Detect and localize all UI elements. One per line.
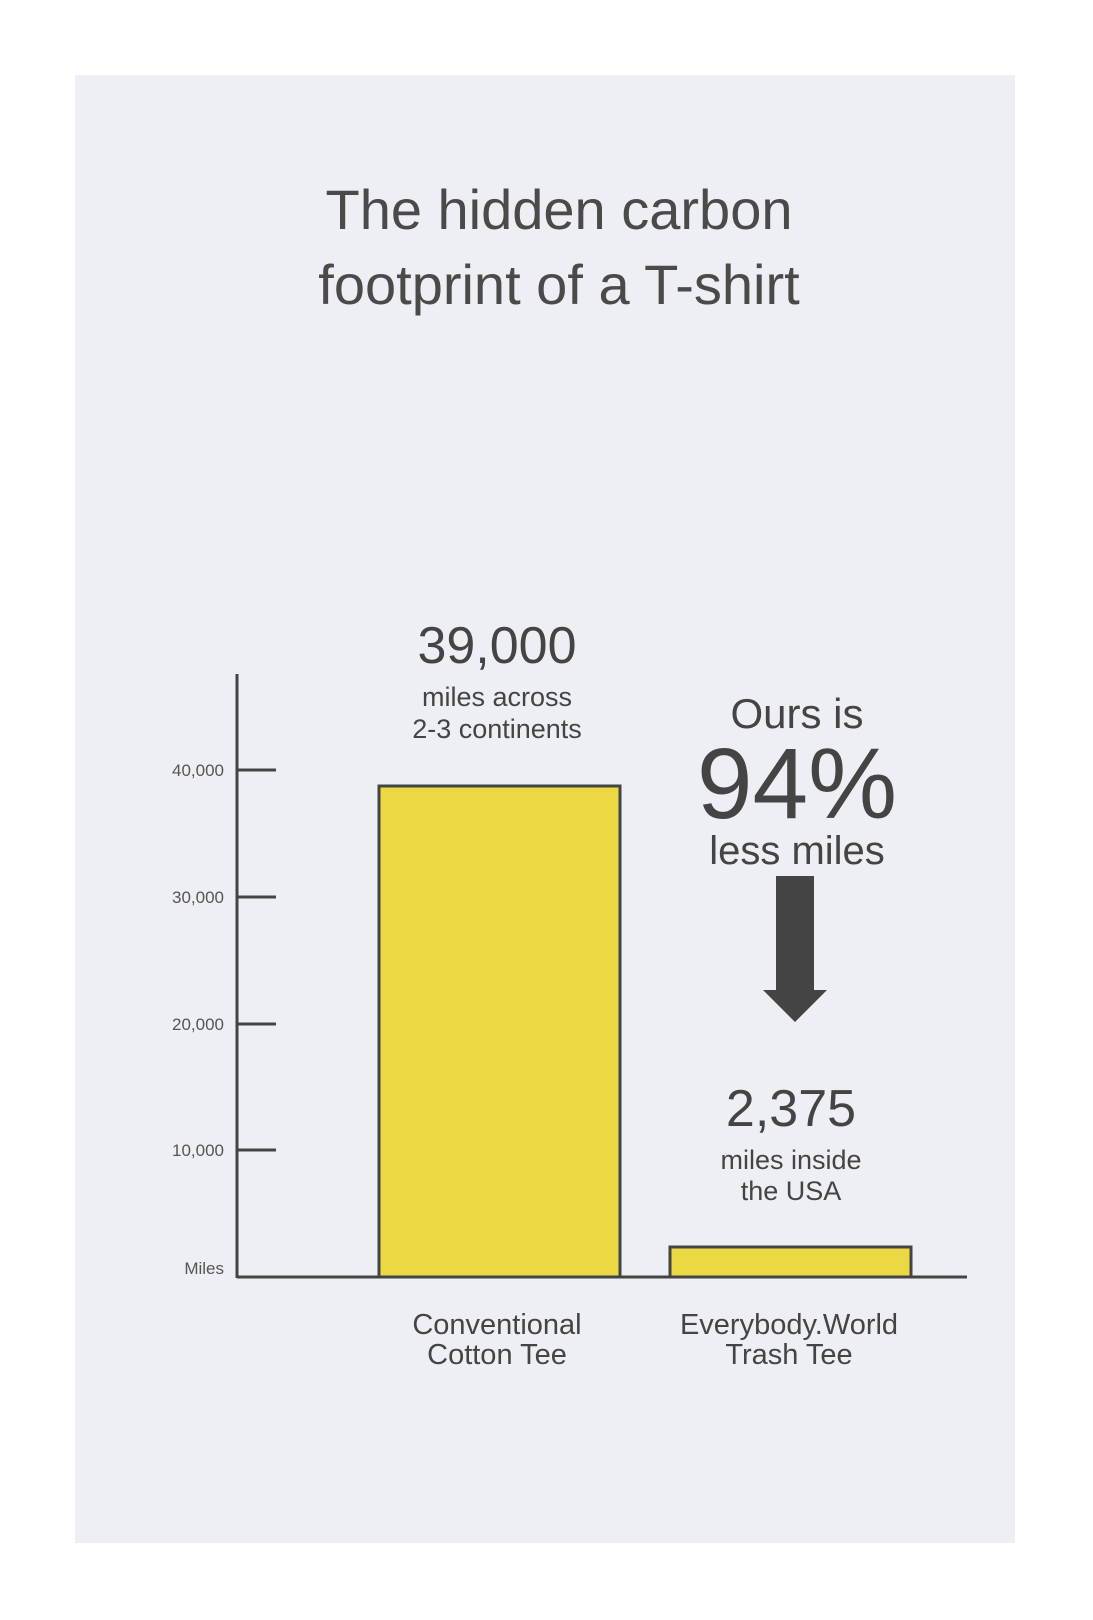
callout: 94% less miles: less miles: [709, 829, 885, 873]
callout: 94% less miles: Ours is: [730, 690, 864, 737]
title: The hidden carbon: [325, 178, 793, 241]
axis labels: 40,000: [172, 761, 224, 780]
axis labels: [172, 761, 224, 1278]
category labels: [412, 1309, 898, 1371]
bar: conventional cotton tee: [379, 786, 620, 1277]
category labels: Everybody.World: [680, 1309, 898, 1341]
axis labels: Miles: [184, 1259, 224, 1278]
axis labels: 20,000: [172, 1015, 224, 1034]
bar: everybody.world trash tee: [670, 1247, 911, 1277]
callout: 94% less miles: [697, 690, 897, 873]
card background: [75, 75, 1015, 1543]
category labels: Cotton Tee: [427, 1339, 567, 1371]
title: [318, 178, 800, 316]
label: 39,000: [412, 617, 582, 744]
category labels: Conventional: [412, 1309, 582, 1341]
label: 2,375: miles inside: [720, 1145, 862, 1175]
axis labels: 10,000: [172, 1141, 224, 1160]
y axis: [237, 674, 967, 1278]
label: 2,375: the USA: [741, 1176, 841, 1206]
label: 39,000: 2-3 continents: [412, 714, 582, 744]
arrow down: [763, 876, 827, 1022]
label: 39,000: miles across: [422, 682, 572, 712]
category labels: Trash Tee: [725, 1339, 853, 1371]
callout: 94% less miles: 94%: [697, 728, 897, 840]
label: 2,375: 2,375: [726, 1080, 856, 1138]
label: 2,375: [720, 1080, 862, 1206]
label: 39,000: 39,000: [417, 617, 577, 675]
axis labels: 30,000: [172, 888, 224, 907]
title: footprint of a T-shirt: [318, 253, 800, 316]
